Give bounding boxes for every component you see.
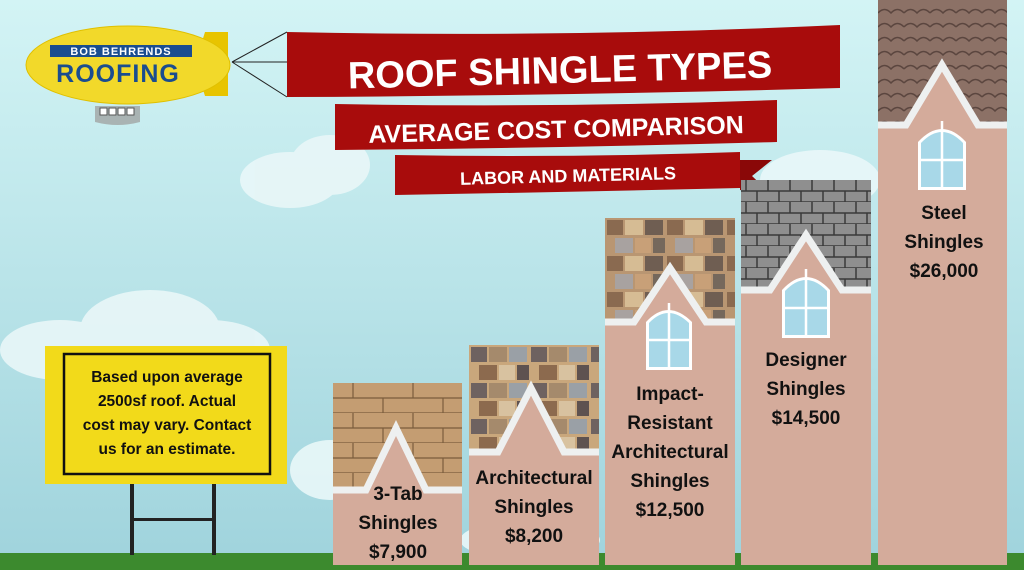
column: 3-Tab: 3-Tab [373,484,423,505]
column: Steel [878,0,1007,565]
column: Impact-Resistant [605,218,735,565]
sign: Based upon average [91,369,243,386]
column: 3-Tab: $7,900 [369,542,427,563]
banner: labor and materials: LABOR AND MATERIALS [460,163,676,189]
column: Architectural: Architectural [475,468,593,489]
banner: labor and materials [395,152,772,195]
column: Impact-Resistant: Resistant [627,413,713,434]
column: Impact-Resistant: Architectural [611,442,729,463]
column: Architectural: Shingles [494,497,574,518]
column: Impact-Resistant: $12,500 [636,500,704,521]
sign: cost may vary. Contact [83,417,251,434]
column: Designer: Shingles [766,379,846,400]
column: Designer: $14,500 [772,408,840,429]
sign [45,346,287,555]
banner: title [287,25,840,98]
column: Architectural: $8,200 [505,526,563,547]
column: Impact-Resistant: Shingles [630,471,710,492]
blimp logo: ROOFING [56,60,180,88]
column: Steel: Steel [921,203,967,224]
column: 3-Tab [333,383,462,565]
banner: title: ROOF SHINGLE TYPES [347,44,773,98]
column: Architectural [469,345,599,565]
column: Designer: Designer [765,350,847,371]
blimp logo: BOB BEHRENDS [70,46,172,58]
blimp logo [26,26,287,125]
banner: subtitle: AVERAGE COST COMPARISON [368,111,744,149]
column: 3-Tab: Shingles [358,513,438,534]
column: Impact-Resistant: Impact- [636,384,704,405]
ground [0,553,1024,570]
column: Steel: Shingles [904,232,984,253]
sign: us for an estimate. [99,441,235,458]
sign: 2500sf roof. Actual [98,393,236,410]
column: Designer [741,180,871,565]
banner: subtitle [335,100,777,150]
clouds [0,135,880,560]
column: Steel: $26,000 [910,261,978,282]
